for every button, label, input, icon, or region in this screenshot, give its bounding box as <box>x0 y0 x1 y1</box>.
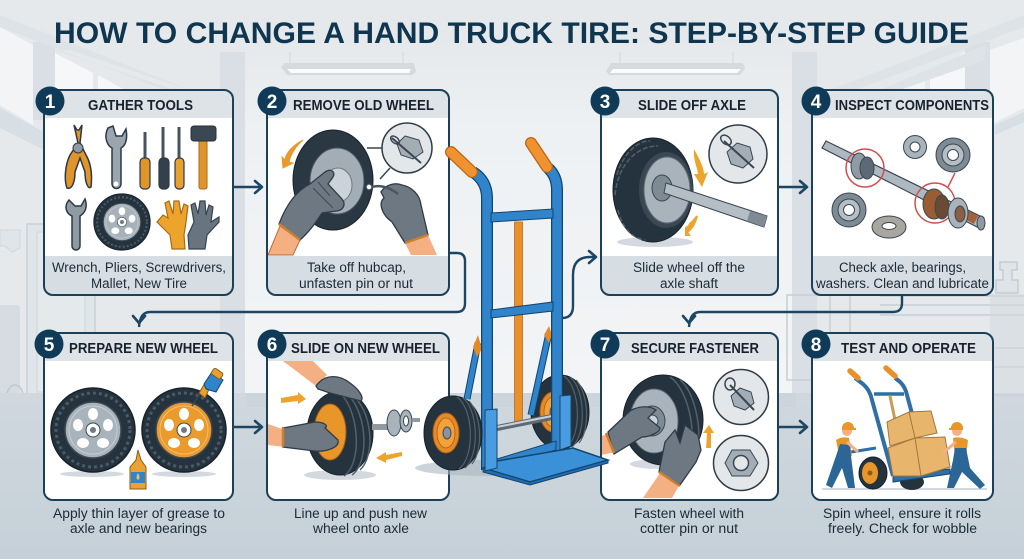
fastener inset <box>382 123 432 173</box>
arrows between steps <box>133 181 902 433</box>
panel 2 caption: Take off hubcap, <box>307 260 406 275</box>
panel 1 header: GATHER TOOLS <box>88 97 193 114</box>
panel 3 header: SLIDE OFF AXLE <box>638 97 746 114</box>
panel 7 header: SECURE FASTENER <box>631 340 759 357</box>
panel 4 caption: Check axle, bearings, <box>839 260 966 275</box>
panel 3 caption: axle shaft <box>660 276 718 291</box>
panel 6 header: SLIDE ON NEW WHEEL <box>291 340 440 357</box>
panel 2 caption: unfasten pin or nut <box>299 276 413 291</box>
panel 7 caption <box>634 506 744 536</box>
wheel and gloved hands <box>268 130 437 255</box>
panel 3: slide off axle <box>601 90 778 295</box>
panel 1 caption: Wrench, Pliers, Screwdrivers, <box>52 260 226 275</box>
panel 8: test and operate <box>812 333 993 500</box>
panel 6 caption: wheel onto axle <box>312 521 409 536</box>
panel 3 caption <box>601 256 778 295</box>
panel 6 caption: Line up and push new <box>294 506 427 521</box>
panel 2: remove old wheel <box>267 90 449 295</box>
panel 1 caption <box>44 256 233 295</box>
hand truck with boxes and workers <box>822 368 987 490</box>
panel 8 caption: Spin wheel, ensure it rolls <box>823 506 981 521</box>
central hand truck illustration <box>415 143 608 485</box>
panel 5 header: PREPARE NEW WHEEL <box>69 340 218 357</box>
panel 7 caption: cotter pin or nut <box>640 521 738 536</box>
panel 8 header: TEST AND OPERATE <box>841 340 976 357</box>
step number badges: 8 <box>811 335 821 356</box>
panel 7 header <box>601 333 778 361</box>
step number badges: 2 <box>267 92 277 113</box>
step number badges: 4 <box>811 92 822 113</box>
panel 4 header: INSPECT COMPONENTS <box>835 97 989 114</box>
wheel and gloved hands <box>601 375 714 498</box>
panel 2 caption <box>267 256 449 295</box>
panel 5: prepare new wheel <box>44 333 233 500</box>
wheel and axle <box>613 138 767 247</box>
panel 6 header <box>267 333 449 361</box>
panel 8 header <box>812 333 993 361</box>
panel 5 caption: axle and new bearings <box>70 521 207 536</box>
panel 4 caption: washers. Clean and lubricate <box>815 276 989 291</box>
panel 6: slide on new wheel <box>267 333 449 500</box>
nut inset <box>714 436 768 490</box>
panel 2 header: REMOVE OLD WHEEL <box>293 97 434 114</box>
ceiling lamps <box>281 52 745 75</box>
step number badges: 1 <box>45 92 56 113</box>
panel 8 caption <box>823 506 981 536</box>
old and new wheels with grease <box>51 368 226 489</box>
panel 8 caption: freely. Check for wobble <box>828 521 977 536</box>
panel 6 caption <box>294 506 427 536</box>
panel 4: inspect components <box>812 90 993 295</box>
step number badges: 7 <box>600 335 610 356</box>
new wheel, hands and hardware <box>268 361 420 480</box>
title: HOW TO CHANGE A HAND TRUCK TIRE: STEP-BY-STEP GUIDE <box>54 17 969 50</box>
tool illustrations <box>65 125 219 250</box>
panel 2 header <box>267 90 449 118</box>
panel 7: secure fastener <box>601 333 778 500</box>
panel 5 header <box>44 333 233 361</box>
step number badges: 3 <box>600 92 610 113</box>
panel 1 caption: Mallet, New Tire <box>91 276 187 291</box>
cotter pin inset <box>714 370 768 424</box>
fastener inset <box>709 125 767 183</box>
step number badges: 6 <box>267 335 277 356</box>
panel 5 caption <box>53 506 225 536</box>
panel 7 caption: Fasten wheel with <box>634 506 744 521</box>
axle, bearings and washers <box>822 136 985 238</box>
panel 3 caption: Slide wheel off the <box>633 260 745 275</box>
step number badges <box>34 86 830 358</box>
panel 1 header <box>44 90 233 118</box>
panel 4 header <box>812 90 993 118</box>
panel 1: gather tools <box>44 90 233 295</box>
panel 3 header <box>601 90 778 118</box>
panel 4 caption <box>812 256 993 295</box>
panel 5 caption: Apply thin layer of grease to <box>53 506 225 521</box>
step number badges: 5 <box>44 335 55 356</box>
